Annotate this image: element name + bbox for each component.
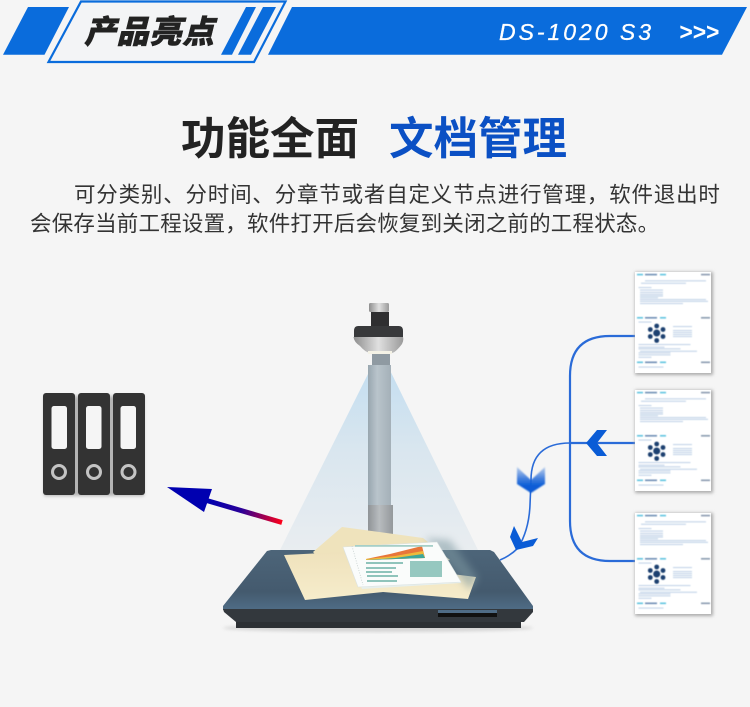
back envelope	[313, 527, 450, 570]
binders icon	[43, 393, 145, 496]
chevron: horizontal left	[586, 430, 607, 456]
scanner light beam	[280, 350, 478, 550]
frame stripes	[221, 7, 276, 55]
header banner	[3, 0, 747, 64]
binder 3	[113, 393, 145, 495]
heading: product highlights: 产品亮点	[84, 14, 218, 50]
left blue parallelogram	[3, 7, 69, 55]
binder 2	[78, 393, 110, 495]
document page 2	[635, 390, 713, 493]
model name: DS-1020 S3	[499, 19, 651, 45]
scanner base	[223, 550, 533, 632]
description paragraph	[30, 183, 721, 236]
envelopes	[284, 527, 476, 600]
arrow: to binders	[167, 487, 282, 522]
main heading: 功能全面 文档管理	[181, 115, 567, 164]
right blue bar	[268, 7, 747, 55]
connector lines	[500, 336, 635, 561]
scanner pole	[368, 353, 393, 535]
binder 1	[43, 393, 75, 495]
chevrons: >>>	[679, 19, 719, 46]
chart area	[366, 546, 425, 560]
title frame	[48, 2, 286, 62]
scanner camera head	[354, 303, 403, 354]
chevron: lower arrow	[510, 526, 538, 550]
chevron: faded down	[517, 467, 545, 493]
description paragraph: 可分类别、分时间、分章节或者自定义节点进行管理，软件退出时	[74, 183, 721, 207]
description paragraph: 会保存当前工程设置，软件打开后会恢复到关闭之前的工程状态。	[30, 212, 659, 236]
document page 1	[635, 272, 713, 375]
document page 3	[635, 513, 713, 616]
chart document stack	[343, 542, 461, 589]
front envelope	[284, 552, 476, 600]
motion blur shadow	[425, 538, 478, 590]
